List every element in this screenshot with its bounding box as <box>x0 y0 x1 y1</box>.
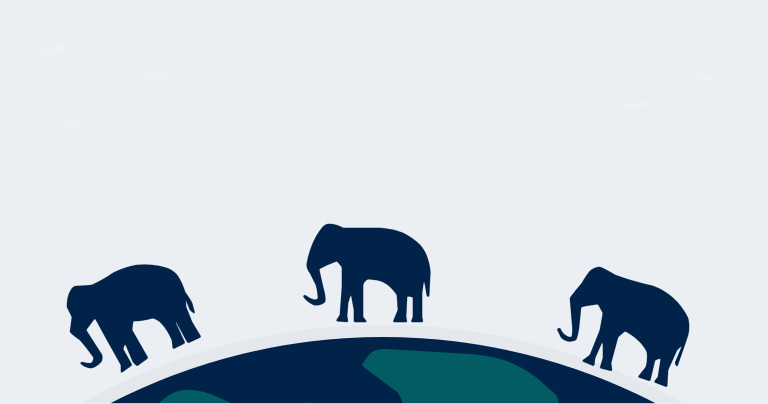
faint birds in the sky <box>35 41 720 129</box>
land mass: centre <box>362 349 558 404</box>
elephant: left <box>67 265 201 373</box>
elephant: centre <box>303 224 430 322</box>
elephant: right <box>557 267 689 387</box>
globe <box>80 325 685 404</box>
globe halo ring <box>80 325 685 404</box>
land mass: left <box>158 390 233 404</box>
land mass: small bottom edge <box>302 402 316 404</box>
globe ocean <box>109 337 657 404</box>
